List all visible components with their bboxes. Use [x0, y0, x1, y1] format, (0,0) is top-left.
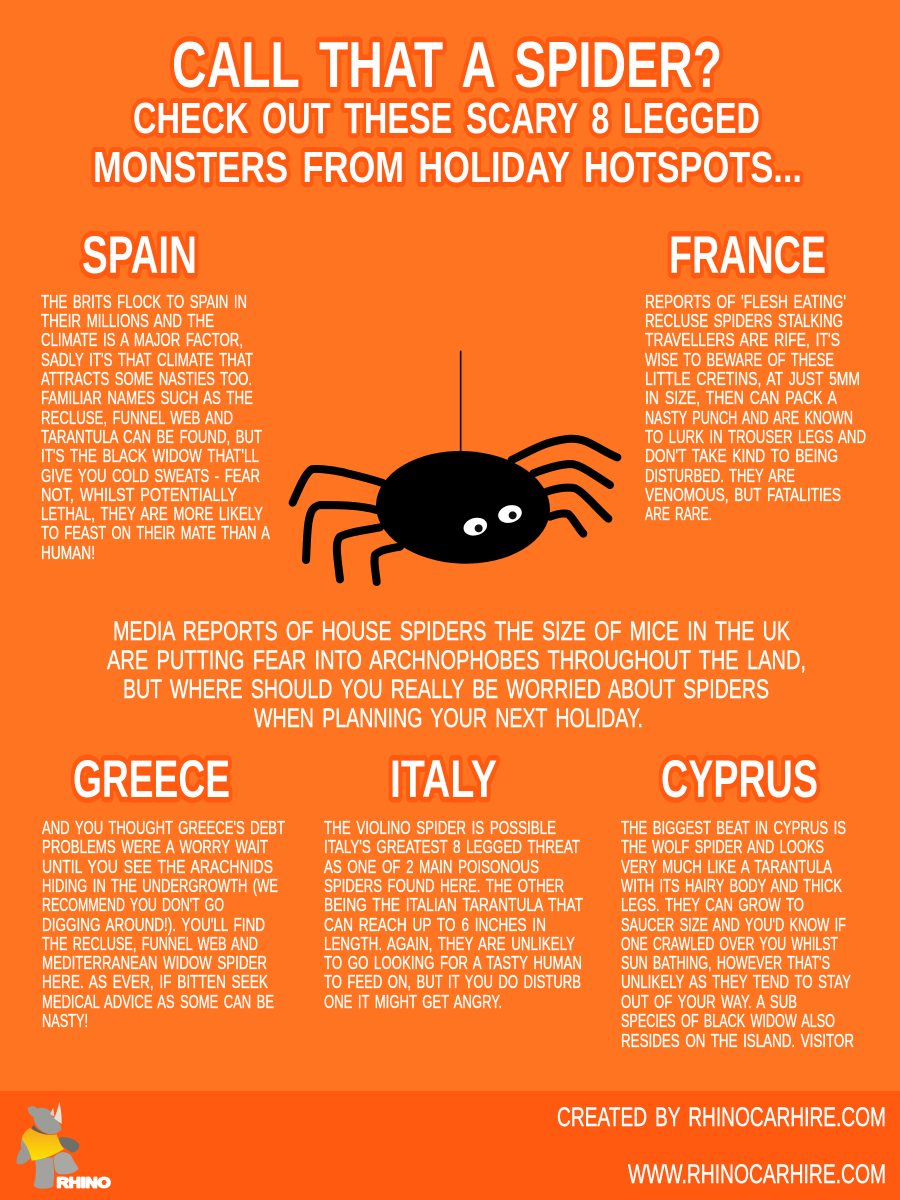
rhino raised leg: [53, 1152, 79, 1174]
text block: Spain: SADLY IT'S THAT CLIMATE THAT: [41, 350, 253, 370]
heading: Spain: SPAIN: [82, 226, 197, 285]
text block: Greece: THE RECLUSE, FUNNEL WEB AND: [42, 934, 258, 954]
text block: Italy: TO FEED ON, BUT IT YOU DO DISTURB: [324, 972, 581, 992]
text block: France: DISTURBED. THEY ARE: [645, 466, 795, 486]
text block: Spain: TARANTULA CAN BE FOUND, BUT: [41, 427, 262, 447]
intro paragraph: WHEN PLANNING YOUR NEXT HOLIDAY.: [254, 703, 643, 733]
spider eye right: [496, 503, 524, 525]
text block: Greece: PROBLEMS WERE A WORRY WAIT: [42, 837, 268, 857]
spider legs: [293, 439, 617, 582]
text block: Italy: [324, 818, 583, 1012]
text block: France: WISE TO BEWARE OF THESE: [645, 350, 834, 370]
text block: Spain: NOT, WHILST POTENTIALLY: [41, 485, 237, 505]
text block: Spain: FAMILIAR NAMES SUCH AS THE: [41, 388, 253, 408]
text block: Spain: THEIR MILLIONS AND THE: [41, 311, 214, 331]
rhino left arm: [17, 1135, 31, 1164]
text block: Spain: LETHAL, THEY ARE MORE LIKELY: [41, 504, 263, 524]
text block: Italy: THE VIOLINO SPIDER IS POSSIBLE: [324, 818, 556, 838]
rhino head: [28, 1106, 61, 1134]
panel: Greece: [42, 750, 285, 1031]
text block: Spain: [41, 292, 270, 563]
text block: France: [645, 292, 866, 524]
spider thread: [458, 351, 463, 453]
text block: France: DON'T TAKE KIND TO BEING: [645, 446, 838, 466]
text block: Italy: TO GO LOOKING FOR A TASTY HUMAN: [324, 953, 582, 973]
text block: Spain: ATTRACTS SOME NASTIES TOO.: [41, 369, 252, 389]
text block: Cyprus: VERY MUCH LIKE A TARANTULA: [621, 857, 832, 877]
text block: Italy: LENGTH. AGAIN, THEY ARE UNLIKELY: [324, 934, 575, 954]
footer band: [0, 1091, 900, 1200]
text block: Greece: MEDITERRANEAN WIDOW SPIDER: [42, 953, 267, 973]
rhino horn: [54, 1101, 62, 1124]
title: [93, 28, 802, 192]
text block: Italy: ITALY'S GREATEST 8 LEGGED THREAT: [324, 837, 580, 857]
rhino small horn: [50, 1107, 54, 1117]
intro paragraph: [107, 616, 806, 733]
text block: Cyprus: LEGS. THEY CAN GROW TO: [621, 895, 804, 915]
panel: France: [645, 226, 866, 524]
text block: France: VENOMOUS, BUT FATALITIES: [645, 485, 841, 505]
text block: Cyprus: [621, 818, 854, 1051]
text block: Greece: DIGGING AROUND!). YOU'LL FIND: [42, 915, 265, 935]
text block: France: ARE RARE.: [645, 504, 712, 524]
text block: Italy: ONE IT MIGHT GET ANGRY.: [324, 992, 502, 1012]
rhino shirt: [22, 1128, 64, 1161]
rhino logo wordmark: RHINO: [57, 1175, 111, 1191]
text block: Spain: IT'S THE BLACK WIDOW THAT'LL: [41, 446, 259, 466]
title: CALL THAT A SPIDER?: [172, 28, 722, 101]
text block: France: TRAVELLERS ARE RIFE, IT'S: [645, 330, 840, 350]
text block: Spain: HUMAN!: [41, 543, 95, 563]
text block: Spain: TO FEAST ON THEIR MATE THAN A: [41, 523, 270, 543]
text block: Italy: SPIDERS FOUND HERE. THE OTHER: [324, 876, 564, 896]
rhino standing leg: [34, 1157, 54, 1189]
text block: Italy: AS ONE OF 2 MAIN POISONOUS: [324, 857, 539, 877]
icon: spider: [293, 351, 617, 582]
text block: Italy: CAN REACH UP TO 6 INCHES IN: [324, 915, 546, 935]
text block: Spain: RECLUSE, FUNNEL WEB AND: [41, 408, 233, 428]
heading: Italy: ITALY: [390, 750, 497, 809]
spider eye left: [461, 515, 489, 538]
text block: Cyprus: OUT OF YOUR WAY. A SUB: [621, 992, 797, 1012]
panel: Spain: [41, 226, 270, 563]
heading: Greece: GREECE: [73, 750, 230, 809]
text block: Greece: NASTY!: [42, 1011, 88, 1031]
text block: Greece: AND YOU THOUGHT GREECE'S DEBT: [42, 818, 285, 838]
text block: Spain: CLIMATE IS A MAJOR FACTOR,: [41, 330, 243, 350]
rhino right arm: [59, 1137, 79, 1153]
text block: Cyprus: THE WOLF SPIDER AND LOOKS: [621, 837, 824, 857]
panel: Italy: [324, 750, 583, 1012]
panel: Cyprus: [621, 750, 854, 1051]
text block: Greece: UNTIL YOU SEE THE ARACHNIDS: [42, 857, 273, 877]
heading: France: FRANCE: [669, 226, 826, 285]
text block: France: IN SIZE, THEN CAN PACK A: [645, 388, 837, 408]
heading: Cyprus: CYPRUS: [661, 750, 818, 809]
rhino collar: [31, 1125, 57, 1138]
text block: Greece: HERE. AS EVER, IF BITTEN SEEK: [42, 972, 268, 992]
text block: Greece: MEDICAL ADVICE AS SOME CAN BE: [42, 992, 274, 1012]
text block: Greece: HIDING IN THE UNDERGROWTH (WE: [42, 876, 278, 896]
text block: Greece: RECOMMEND YOU DON'T GO: [42, 895, 224, 915]
icon: rhino logo: [17, 1101, 111, 1191]
text block: Spain: THE BRITS FLOCK TO SPAIN IN: [41, 292, 247, 312]
spider body: [374, 448, 552, 567]
text block: Greece: [42, 818, 285, 1031]
text block: Italy: BEING THE ITALIAN TARANTULA THAT: [324, 895, 583, 915]
text block: Spain: GIVE YOU COLD SWEATS - FEAR: [41, 466, 260, 486]
